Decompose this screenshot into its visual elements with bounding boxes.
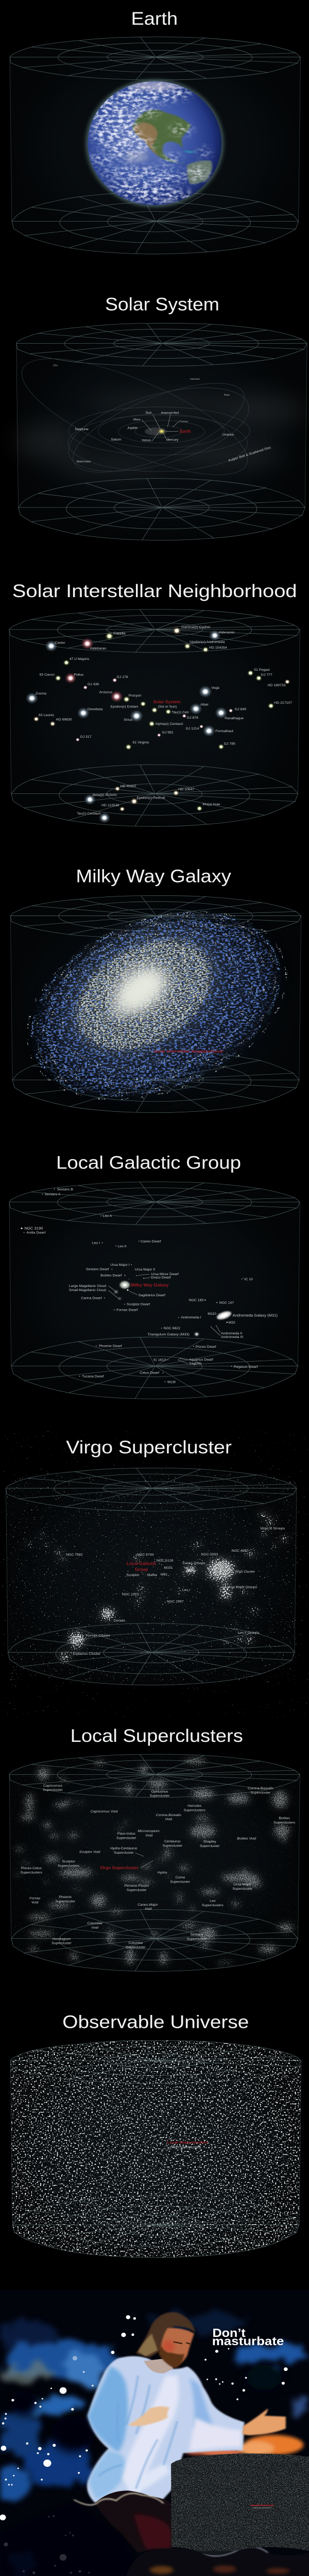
labels: superclusters: Void [165, 1818, 172, 1821]
labels: stars: Beta(β) Pictoris [93, 793, 117, 797]
labels: stars: HD 69830 [56, 718, 72, 721]
labels: superclusters: Void [31, 1901, 39, 1905]
labels: stars: HD 154354 [209, 646, 227, 650]
labels: superclusters: Void [91, 1926, 98, 1929]
labels: superclusters: Shapley [203, 1840, 216, 1843]
labels: galaxies: Andromeda Galaxy (M31) [233, 1313, 278, 1318]
labels: galaxies: Cetus Dwarf [140, 1371, 159, 1375]
labels: clusters: Local Galactic [127, 1562, 157, 1566]
label: Solar Interstellar Neighborhood: Solar Interstellar Neighborhood [153, 1049, 223, 1054]
labels: superclusters: Virgo Supercluster [100, 1866, 139, 1870]
labels: galaxies: Large Magellanic Cloud [69, 1284, 106, 1288]
labels: clusters: Ursa Major Groups [227, 1586, 258, 1589]
labels: solar system: Saturn [111, 438, 122, 442]
panel: closing image [0, 2290, 309, 2576]
labels: stars: Alpha(α) Centauri [156, 722, 183, 726]
labels: clusters: NGC 6744 [137, 1553, 154, 1556]
labels: stars: Aldebaran [90, 647, 107, 651]
labels: superclusters: Pavo-Indus [117, 1832, 135, 1836]
labels: stars: GJ 777 [261, 673, 272, 676]
labels: galaxies: Leo I [92, 1242, 100, 1245]
clouds [0, 2490, 309, 2576]
labels: clusters: Sculptor [126, 1573, 140, 1577]
labels: solar system: Mercury [166, 438, 179, 442]
labels: galaxies: Aquarius Dwarf [189, 1358, 213, 1362]
labels: galaxies: Boötes Dwarf [100, 1274, 122, 1277]
labels: solar system: Neptune [75, 428, 89, 431]
panel: Virgo Supercluster [6, 1437, 298, 1685]
caption: Don't masturbate: masturbate [212, 2335, 284, 2348]
labels: superclusters: Supercluster [127, 1888, 147, 1892]
panel: Local Superclusters [8, 1725, 301, 1973]
labels: superclusters: Pisces-Cetus [21, 1867, 42, 1870]
title: Local Superclusters: Local Superclusters [71, 1725, 243, 1746]
labels: clusters: NGC 5128 [157, 1559, 174, 1563]
figure: robed figure [87, 2356, 244, 2505]
labels: stars: Alderamin [219, 631, 235, 634]
labels: superclusters: Superclusters [273, 1821, 296, 1824]
labels: stars: HD 217107 [274, 701, 292, 705]
labels: stars: HD 113538 [101, 804, 119, 807]
labels: stars: Gamma(γ) Cephei [181, 625, 211, 629]
labels: solar system: Asteroid Belt [161, 412, 179, 415]
labels: superclusters: Horologium [53, 1938, 71, 1941]
labels: superclusters: Supercluster [114, 1851, 134, 1855]
labels: stars: Formalhaut [215, 730, 233, 733]
labels: galaxies: Ursa Major I [110, 1263, 130, 1267]
labels: galaxies: Pisces Dwarf [196, 1345, 216, 1349]
labels: clusters: Dorado [114, 1619, 126, 1623]
labels: stars: 83 Leonis [39, 714, 55, 717]
labels: stars: Denebola [88, 708, 103, 711]
labels: solar system: Sun [145, 411, 152, 415]
labels: superclusters: Superclusters [202, 1904, 224, 1907]
labels: clusters: NGC 1023 [122, 1593, 139, 1597]
labels: solar system: Makemake [76, 461, 91, 463]
labels: stars: Tau(τ) Ceti [172, 710, 189, 714]
labels: galaxies: Canes Dwarf [141, 1240, 161, 1243]
labels: galaxies: Pegasus Dwarf [234, 1365, 258, 1369]
labels: clusters: NGC 5033 [201, 1553, 218, 1556]
Kuiper belt haze [14, 394, 305, 474]
labels: superclusters: Supercluster [232, 1887, 253, 1891]
icon: Earth globe [85, 79, 236, 207]
labels: solar system: Kuiper Belt & Scattered Disc [228, 446, 272, 463]
labels: clusters: Group [135, 1567, 148, 1572]
labels: galaxies: Andromeda II [221, 1332, 242, 1335]
labels: galaxies: M32 [228, 1321, 235, 1325]
panel: Earth [10, 8, 301, 254]
labels: superclusters: Void [145, 1907, 152, 1911]
labels: superclusters: Microscopium [138, 1829, 160, 1833]
labels: galaxies: Sculptor Dwarf [127, 1303, 150, 1307]
labels: superclusters: Fornax [29, 1897, 41, 1900]
labels: galaxies: Ursa Major II [135, 1268, 155, 1272]
labels: galaxies: Phoenix Dwarf [99, 1345, 122, 1348]
labels: clusters: M81 [161, 1573, 168, 1577]
labels: superclusters: Phoenix [59, 1895, 72, 1899]
labels: superclusters: Supercluster [116, 1836, 136, 1840]
labels: stars: Solar System [153, 700, 181, 704]
panel: Milky Way Galaxy [0, 866, 309, 1137]
chart: galaxy star field [8, 2038, 304, 2261]
labels: galaxies: Fornax Dwarf [116, 1309, 138, 1312]
labels: stars: Pollux [74, 673, 84, 676]
galaxies [21, 1189, 232, 1382]
labels: stars: Upsilon(υ) Andromeda [190, 640, 225, 644]
labels: superclusters: Void [146, 1834, 152, 1837]
labels: stars: Vega [211, 686, 219, 690]
labels: stars: Tau(τ) Centauri [77, 812, 101, 816]
labels: stars: GJ 317 [80, 735, 92, 739]
labels: stars: Altair [200, 703, 209, 706]
labels: clusters: Leo I [182, 1588, 190, 1592]
labels: galaxies: SagDIG [189, 1362, 201, 1365]
labels: superclusters: Superclusters [58, 1865, 80, 1868]
sky background [0, 2290, 309, 2576]
labels: galaxies: NGC 3190 [24, 1226, 43, 1231]
labels: superclusters: Leo [210, 1900, 216, 1903]
chart: supercluster clouds [8, 1754, 301, 1973]
fire glow [183, 2435, 303, 2457]
labels: superclusters: Supercluster [187, 1938, 207, 1941]
labels: superclusters: Ursa Major [234, 1883, 251, 1887]
labels: solar system: Ceres [181, 420, 188, 423]
caption: Don't masturbate: Don’t [212, 2327, 246, 2340]
labels: superclusters: Hydra [158, 1871, 167, 1874]
title: Solar Interstellar Neighborhood: Solar Interstellar Neighborhood [12, 581, 297, 601]
labels: clusters: NGC 4697 [232, 1549, 248, 1553]
labels: stars: GJ 1214 [185, 727, 199, 731]
labels: superclusters: Supercluster [43, 1788, 63, 1792]
labels: galaxies: Antila Dwarf [26, 1231, 45, 1234]
labels: clusters: Fornax Cluster [85, 1634, 111, 1637]
labels: galaxies: NGC 147 [219, 1301, 234, 1304]
figure: right hand [243, 2409, 286, 2435]
labels: galaxies [24, 1188, 278, 1384]
labels: stars: Epsilon(ε) Reticuli [137, 796, 165, 800]
labels: clusters: Canes Groups [182, 1562, 205, 1565]
labels: superclusters: Supercluster [170, 1880, 191, 1884]
labels: galaxies: M110 [208, 1312, 216, 1316]
labels: stars: Arcturus [99, 691, 113, 694]
labels: galaxies: Leo II [117, 1245, 127, 1248]
labels: superclusters: Columbia [87, 1922, 102, 1925]
title: Solar System: Solar System [105, 294, 219, 314]
labels: superclusters: Coma [176, 1876, 185, 1879]
labels: superclusters: Supercluster [52, 1942, 72, 1945]
labels: stars: (Sol or Sun) [158, 705, 177, 709]
labels: clusters: M101 [164, 1566, 173, 1570]
labels: galaxies: Draco Dwarf [151, 1276, 171, 1279]
labels: superclusters: Canes-Major [138, 1903, 158, 1907]
labels: stars: 61 Virginis [133, 741, 149, 744]
labels: superclusters: Sculptor [62, 1860, 76, 1863]
labels: stars [36, 625, 292, 816]
title: Milky Way Galaxy: Milky Way Galaxy [76, 866, 231, 886]
labels: stars: Rasalhague [225, 717, 244, 720]
figure: head and hair [136, 2312, 195, 2368]
labels: superclusters: Capricornus [43, 1784, 63, 1788]
labels: solar system [53, 364, 272, 463]
figure: left hand [128, 2406, 169, 2426]
labels: solar system: Pluto [224, 394, 230, 397]
labels: stars: GJ 176 [117, 675, 128, 679]
labels: stars: Procyon [128, 694, 142, 698]
title: Virgo Supercluster: Virgo Supercluster [66, 1437, 232, 1458]
mini cylinder: observable universe [169, 2452, 309, 2555]
labels: solar system: Haumea [190, 378, 200, 381]
labels: galaxies: Sextans A [44, 1193, 61, 1196]
labels: superclusters: Ophiuchus [151, 1790, 168, 1793]
labels: superclusters: Corona Borealis [156, 1814, 182, 1817]
leader lines [108, 1274, 244, 1364]
panel: Solar System [7, 294, 307, 540]
labels: galaxies: Small Magellanic Cloud [69, 1289, 106, 1292]
labels: galaxies: Tucana Dwarf [82, 1375, 104, 1379]
labels: solar system: Earth [180, 429, 191, 434]
labels: superclusters: Supercluster [200, 1844, 220, 1848]
labels: galaxies: Andromeda III [221, 1335, 243, 1339]
labels: superclusters: Boötes [279, 1817, 290, 1820]
labels: stars: GJ 436 [88, 683, 99, 686]
labels: superclusters: Supercluster [251, 1791, 271, 1794]
labels: stars: GJ 876 [187, 716, 198, 720]
panel: Local Galactic Group [9, 1153, 300, 1399]
labels: superclusters: Superclusters [184, 1809, 205, 1812]
labels: clusters: NGC 2997 [167, 1600, 184, 1603]
stars [0, 2315, 288, 2574]
labels: superclusters: Hydra-Centaurus [110, 1847, 138, 1850]
labels: galaxies: WLM [167, 1381, 176, 1384]
title: Earth: Earth [131, 8, 178, 29]
labels: clusters: Virgo III Groups [260, 1527, 285, 1531]
labels: superclusters: Hercules [187, 1804, 202, 1808]
labels: stars: 47 U Majoris [70, 657, 90, 661]
labels: superclusters: Perseus-Pisces [124, 1884, 149, 1888]
orbit diagram [7, 336, 263, 497]
labels: clusters [66, 1527, 285, 1656]
labels: solar system: Venus [142, 439, 151, 442]
chart: spiral galaxy [0, 874, 309, 1137]
labels: clusters: Maffei [147, 1573, 157, 1577]
labels: superclusters: Sculptor Void [79, 1851, 100, 1854]
chart: galaxy clusters [8, 1473, 298, 1683]
labels: clusters: NGC 7582 [66, 1553, 83, 1556]
labels: superclusters [21, 1784, 296, 1949]
title: Observable Universe: Observable Universe [62, 2012, 249, 2032]
labels: clusters: Eridanus Cluster [73, 1652, 101, 1656]
labels: stars: Capella [113, 632, 126, 635]
labels: stars: GJ 581 [162, 731, 174, 735]
labels: superclusters: Corona-Borealis [248, 1787, 273, 1790]
labels: galaxies: NGC 185 [189, 1299, 204, 1302]
labels: galaxies: Ursa Minor Dwarf [151, 1273, 179, 1276]
labels: solar system: Mars [133, 418, 141, 421]
labels: galaxies: Sextans Dwarf [86, 1268, 109, 1272]
labels: galaxies: Triangulum Galaxy (M33) [147, 1333, 190, 1336]
labels: clusters: Leo II Groups [237, 1631, 260, 1635]
labels: stars: 51 Pegasi [254, 668, 270, 672]
labels: stars: GJ 785 [224, 742, 235, 745]
caption: Don't masturbate [212, 2327, 284, 2348]
labels: galaxies: Andromeda I [181, 1316, 201, 1319]
labels: stars: Epsilon(ε) Eridani [111, 705, 139, 709]
labels: superclusters: Capricornus Void [91, 1810, 118, 1814]
labels: galaxies: NGC 6822 [164, 1327, 180, 1330]
labels: solar system: Jupiter [127, 426, 138, 430]
labels: stars: Castor [55, 641, 65, 645]
label: Local Superclusters: Local Superclusters [167, 2141, 208, 2144]
labels: galaxies: IC 1613 [153, 1359, 166, 1362]
labels: galaxies: Sextans B [57, 1188, 74, 1191]
labels: galaxies: Sagittarius Dwarf [139, 1294, 165, 1297]
labels: stars: GJ 849 [235, 707, 246, 711]
labels: superclusters: Supercluster [126, 1946, 146, 1949]
star field [26, 626, 290, 823]
labels: superclusters: Centaurus [164, 1840, 181, 1843]
labels: galaxies: Leo A [103, 1214, 112, 1218]
labels: solar system: Eris [53, 364, 58, 367]
panel: Solar Interstellar Neighborhood [9, 581, 300, 826]
labels: superclusters: Supercluster [55, 1900, 76, 1904]
labels: stars: HD 189733 [268, 684, 286, 687]
labels: solar system: Uranus [222, 433, 234, 437]
labels: superclusters: Columba [129, 1941, 143, 1945]
labels: stars: Zosma [36, 692, 46, 696]
labels: superclusters: Superclusters [21, 1871, 43, 1875]
labels: stars: Sirius [124, 718, 133, 722]
title: Local Galactic Group: Local Galactic Group [56, 1153, 241, 1173]
labels: superclusters: Sextans [190, 1933, 203, 1937]
label: Virgo supercluster: (Virgo supercluster) [170, 2146, 201, 2149]
labels: superclusters: Boötes Void [237, 1837, 256, 1841]
labels: galaxies: IC 10 [244, 1278, 253, 1281]
labels: stars: Mu(μ) Arae [202, 803, 220, 806]
labels: superclusters: Supercluster [163, 1844, 183, 1848]
labels: stars: HD 10647 [178, 788, 195, 791]
labels: galaxies: Milky Way Galaxy [131, 1282, 169, 1287]
panel: Observable Universe [8, 2012, 304, 2261]
labels: superclusters: Supercluster [150, 1794, 170, 1798]
labels: clusters: Virgo Cluster [234, 1570, 255, 1574]
labels: stars: 55 Cancri [40, 673, 55, 676]
labels: stars: HD 40307 [121, 785, 136, 788]
labels: galaxies: Carina Dwarf [81, 1297, 102, 1300]
